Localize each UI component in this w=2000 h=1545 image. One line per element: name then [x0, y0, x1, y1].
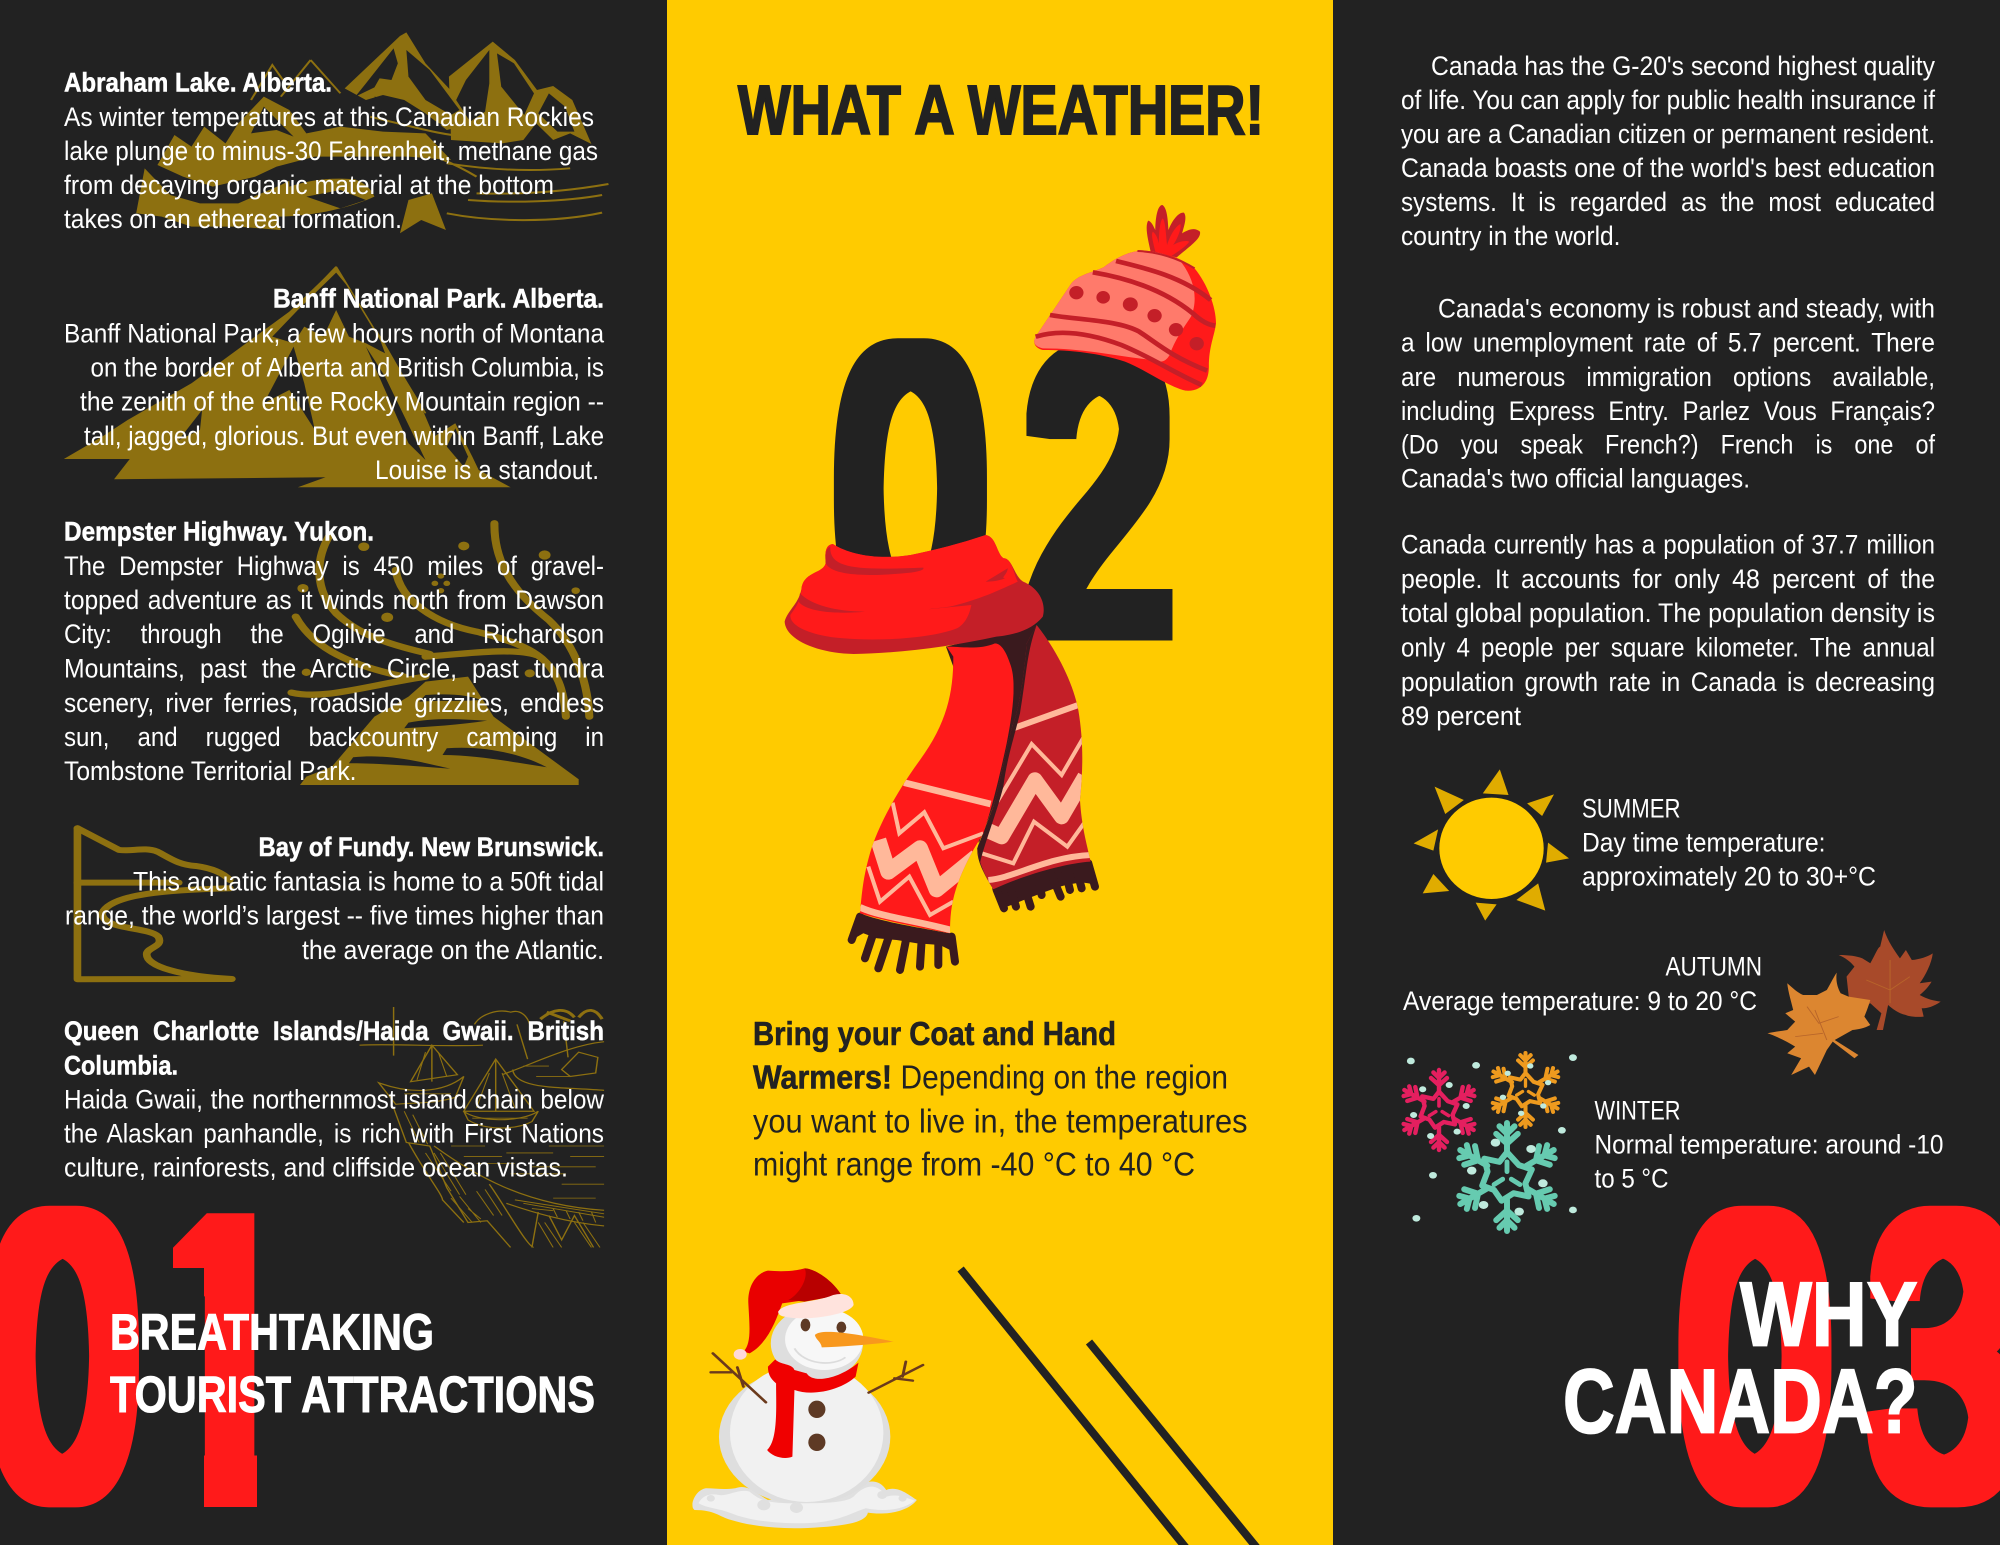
- number: 03: [1681, 1136, 2000, 1545]
- text: winter: [1594, 1095, 1944, 1193]
- text: Banff National Park: [64, 284, 605, 485]
- text: autumn: AUTUMN: [1666, 952, 1762, 982]
- text: Banff National Park: Banff National Park, a few hours north of Montana: [64, 318, 605, 348]
- text: Dempster Highway: sun, and rugged backcountry camping in: [64, 722, 604, 752]
- text: Queen Charlotte Islands: [64, 1016, 604, 1183]
- text: Dempster Highway: topped adventure as it winds north from Dawson: [64, 585, 604, 615]
- text: population: Canada currently has a population of 37.7 million: [1401, 530, 1935, 560]
- heading: why canada: CANADA?: [1563, 1352, 1918, 1453]
- text: economy: Canada's two official languages.: [1401, 464, 1750, 494]
- text: quality of life: country in the world.: [1401, 221, 1620, 251]
- text: Banff National Park: tall, jagged, glorious. But even within Banff, Lake: [84, 421, 604, 451]
- icon: autumn leaves: [1767, 930, 1941, 1075]
- text: economy: [1401, 294, 1935, 494]
- text: summer: approximately 20 to 30+°C: [1582, 862, 1876, 892]
- text: bring your coat: [753, 1015, 1248, 1182]
- text: Bay of Fundy: range, the world’s largest -- five times higher than: [65, 901, 604, 931]
- text: Abraham Lake: [64, 68, 598, 234]
- text: autumn: Average temperature: 9 to 20 °C: [1403, 986, 1757, 1016]
- text: winter: Normal temperature: around -10: [1594, 1129, 1944, 1159]
- text: population: population growth rate in Canada is decreasing: [1401, 667, 1935, 697]
- icon: scarf wrap: [785, 535, 1044, 654]
- text: quality of life: you are a Canadian citizen or permanent resident.: [1401, 119, 1935, 149]
- icon: snowman: [692, 1268, 923, 1528]
- icon: scarf tails: [847, 617, 1100, 970]
- icon: snowflakes: [1400, 1053, 1577, 1231]
- heading: breathtaking tourist attractions: [110, 1303, 595, 1423]
- text: bring your coat: you want to live in, the temperatures: [753, 1102, 1248, 1140]
- text: winter: WINTER: [1594, 1095, 1680, 1125]
- text: Abraham Lake: lake plunge to minus-30 Fahrenheit, methane gas: [64, 136, 598, 166]
- text: bring your coat: Warmers!: [753, 1058, 892, 1096]
- text: Banff National Park: the zenith of the entire Rocky Mountain region --: [80, 386, 604, 416]
- number: 02: 0: [836, 268, 984, 709]
- heading: why canada: [1563, 1265, 1918, 1453]
- text: Dempster Highway: Mountains, past the Arctic Circle, past tundra: [64, 654, 605, 684]
- text: summer: SUMMER: [1582, 794, 1680, 824]
- text: bring your coat: Bring your Coat and Hand: [753, 1015, 1116, 1052]
- text: quality of life: systems. It is regarded as the most educated: [1401, 187, 1935, 217]
- text: Dempster Highway: [64, 516, 605, 786]
- number: 02: 2: [1025, 273, 1173, 714]
- text: population: total global population. The population density is: [1401, 598, 1935, 628]
- text: Bay of Fundy: Bay of Fundy. New Brunswick.: [258, 832, 604, 862]
- illustration: Dempster Highway swirls and hill: [291, 523, 589, 785]
- heading: why canada: WHY: [1740, 1265, 1918, 1366]
- text: Banff National Park: on the border of Alberta and British Columbia, is: [90, 352, 604, 382]
- text: quality of life: Canada boasts one of the world's best education: [1401, 153, 1935, 183]
- text: bring your coat: might range from -40 °C to 40 °C: [753, 1146, 1195, 1182]
- text: population: only 4 people per square kilometer. The annual: [1401, 632, 1935, 662]
- text: Banff National Park: Banff National Park. Alberta.: [273, 284, 604, 314]
- text: economy: are numerous immigration options available,: [1401, 362, 1935, 392]
- icon: knit hat: [1034, 205, 1216, 391]
- heading: breathtaking tourist attractions: TOURIST ATTRACTIONS: [110, 1366, 595, 1423]
- text: economy: (Do you speak French?) French is one of: [1401, 430, 1935, 460]
- text: population: [1401, 530, 1935, 731]
- text: Queen Charlotte Islands: Queen Charlotte Islands/Haida Gwaii. British: [64, 1016, 604, 1046]
- text: Dempster Highway: scenery, river ferries, roadside grizzlies, endless: [64, 688, 604, 718]
- illustration: Bay of Fundy outline: [77, 828, 232, 979]
- heading: breathtaking tourist attractions: BREATHTAKING: [110, 1303, 434, 1360]
- text: quality of life: [1401, 51, 1935, 251]
- text: summer: Day time temperature:: [1582, 828, 1826, 858]
- text: economy: Canada's economy is robust and steady, with: [1438, 294, 1935, 324]
- illustration: Banff mountain: [64, 267, 511, 487]
- text: Bay of Fundy: [65, 832, 604, 965]
- text: economy: a low unemployment rate of 5.7 percent. There: [1401, 328, 1935, 358]
- number: 01: [0, 1206, 257, 1508]
- panel: left attractions: [0, 32, 609, 1508]
- text: summer: [1582, 794, 1876, 892]
- text: Queen Charlotte Islands: Columbia.: [64, 1050, 178, 1080]
- text: population: 89 percent: [1401, 701, 1521, 731]
- text: Dempster Highway: Dempster Highway. Yukon.: [64, 516, 374, 546]
- text: Bay of Fundy: This aquatic fantasia is home to a 50ft tidal: [133, 867, 604, 897]
- icon: sun: [1414, 769, 1569, 921]
- title: WHAT A WEATHER!: [738, 71, 1264, 149]
- illustration: Abraham Lake mountains: [136, 32, 608, 233]
- panel: center weather: [667, 0, 1333, 1545]
- text: Dempster Highway: Tombstone Territorial Park.: [64, 756, 356, 786]
- text: quality of life: Canada has the G-20's second highest quality: [1431, 51, 1935, 81]
- text: Dempster Highway: City: through the Ogilvie and Richardson: [64, 619, 604, 649]
- text: Abraham Lake: Abraham Lake. Alberta.: [64, 68, 332, 98]
- decorative diagonal lines: [961, 1269, 1257, 1545]
- text: population: people. It accounts for only 48 percent of the: [1401, 564, 1935, 594]
- text: Dempster Highway: The Dempster Highway is 450 miles of gravel-: [64, 551, 604, 581]
- text: Queen Charlotte Islands: culture, rainforests, and cliffside ocean vistas.: [64, 1153, 568, 1183]
- text: Queen Charlotte Islands: the Alaskan panhandle, is rich with First Nations: [64, 1118, 604, 1148]
- text: Bay of Fundy: the average on the Atlantic.: [302, 935, 604, 965]
- text: Queen Charlotte Islands: Haida Gwaii, the northernmost island chain below: [64, 1085, 604, 1115]
- text: economy: including Express Entry. Parlez Vous Français?: [1401, 396, 1935, 426]
- text: Abraham Lake: from decaying organic material at the bottom: [64, 170, 554, 200]
- text: winter: to 5 °C: [1594, 1163, 1668, 1193]
- text: Abraham Lake: takes on an ethereal formation.: [64, 204, 402, 234]
- text: bring your coat: Depending on the region: [900, 1058, 1228, 1096]
- text: quality of life: of life. You can apply for public health insurance if: [1401, 85, 1935, 115]
- illustration: Haida Gwaii line art: [360, 1007, 604, 1247]
- text: autumn: [1403, 952, 1762, 1016]
- text: Abraham Lake: As winter temperatures at this Canadian Rockies: [64, 102, 594, 132]
- number: 02: [836, 268, 1173, 714]
- text: Banff National Park: Louise is a standout.: [375, 455, 599, 485]
- panel: right why canada: [1333, 0, 2000, 1545]
